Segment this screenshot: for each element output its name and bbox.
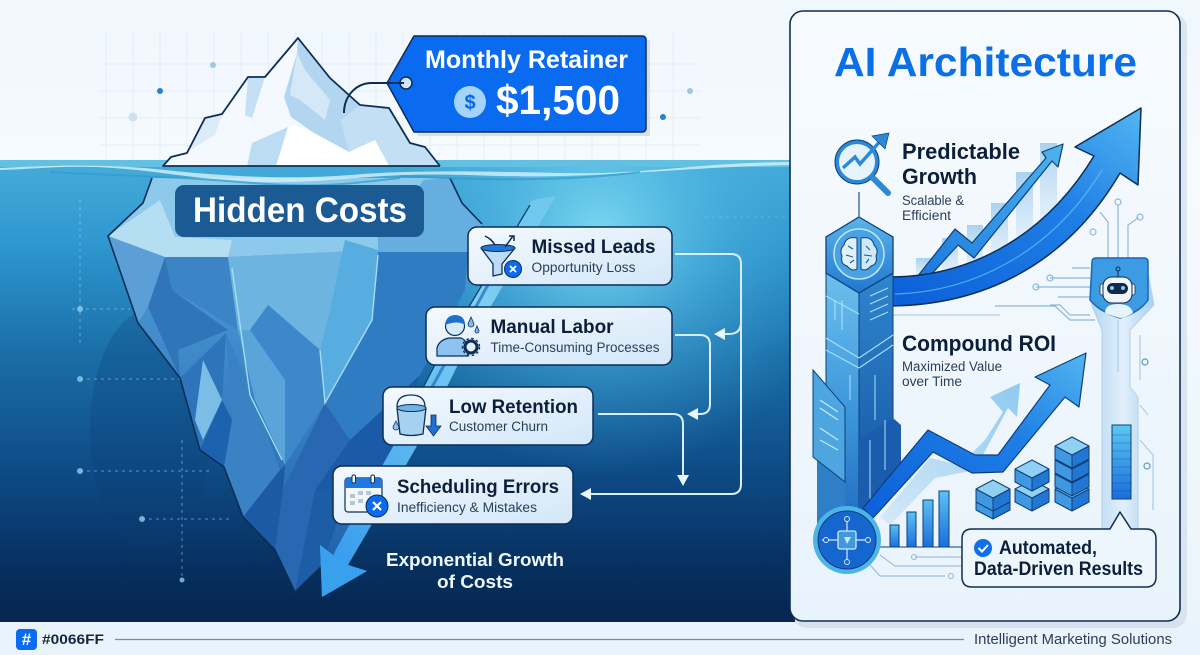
icon: hash [16,629,37,650]
callout: automated results: Data-Driven Results [974,559,1143,580]
text: predictable growth [902,139,1020,223]
meter [1112,425,1131,499]
icon: ai chip circle [813,506,881,574]
icon: robot [1090,258,1148,318]
text: compound roi: over Time [902,374,962,389]
icon: hash: # [22,630,32,649]
arrow: main growth curve [890,108,1141,306]
card: scheduling errors: Inefficiency & Mistakes [397,500,537,515]
panel: ai architecture [790,11,1187,628]
caption: exponential growth of costs: of Costs [437,571,513,592]
icon: funnel [481,236,522,278]
footer bar [0,622,1200,655]
iceberg above water [163,38,440,166]
text: predictable growth: Efficient [902,208,951,223]
card: low retention: Low Retention [449,397,578,418]
text: predictable growth: Predictable [902,139,1020,164]
icon: calendar with error badge [345,475,388,517]
icon: leaking bucket [393,395,441,436]
footer bar: #0066FF [42,631,104,647]
heading: ai architecture: AI Architecture [834,39,1137,85]
footer bar: Intelligent Marketing Solutions [974,632,1172,648]
arrow: predictable growth thin trend [917,144,1063,277]
icon: magnifier with trend [835,133,889,193]
text: predictable growth: Scalable & [902,193,964,208]
card: low retention [383,387,593,445]
price tag: monthly retainer: Monthly Retainer [425,46,628,74]
card: missed leads: Missed Leads [532,237,656,258]
card: manual labor [426,307,672,365]
price tag: monthly retainer: $ [464,92,476,114]
price tag: monthly retainer: $1,500 [496,77,620,123]
water background [0,160,795,622]
caption: exponential growth of costs: Exponential Growth [386,549,564,570]
card: missed leads [468,227,672,285]
callout: automated results: Automated, [999,538,1097,559]
small bar chart [880,491,965,547]
icon: brain [834,229,884,279]
tube column [1092,262,1154,530]
icon: worker with gear [437,315,480,356]
heading: hidden costs [175,185,424,237]
water surface waves [0,160,795,185]
callout: automated results [962,512,1156,587]
text: compound roi: Compound ROI [902,331,1056,356]
card: scheduling errors: Scheduling Errors [397,477,559,498]
heading: hidden costs: Hidden Costs [193,191,407,230]
text: compound roi: Maximized Value [902,359,1002,374]
caption: exponential growth of costs [386,549,564,592]
card: low retention: Customer Churn [449,419,548,434]
text: predictable growth: Growth [902,164,977,189]
card: manual labor: Manual Labor [490,317,614,338]
tower [813,192,901,530]
background bars [916,143,1057,280]
text: compound roi [902,331,1056,389]
price tag: monthly retainer [344,36,650,136]
circuit lines lower [870,554,965,578]
circuit lines upper [995,199,1143,320]
iceberg below water [108,178,483,592]
connector arrows [580,254,741,500]
card: manual labor: Time-Consuming Processes [490,340,660,355]
data cube stacks [976,437,1089,519]
arrow: compound roi light [880,383,1020,525]
exponential growth arrow [320,196,556,597]
card: scheduling errors [333,466,573,524]
arrow: compound roi trend [863,353,1086,518]
card: missed leads: Opportunity Loss [532,260,636,275]
